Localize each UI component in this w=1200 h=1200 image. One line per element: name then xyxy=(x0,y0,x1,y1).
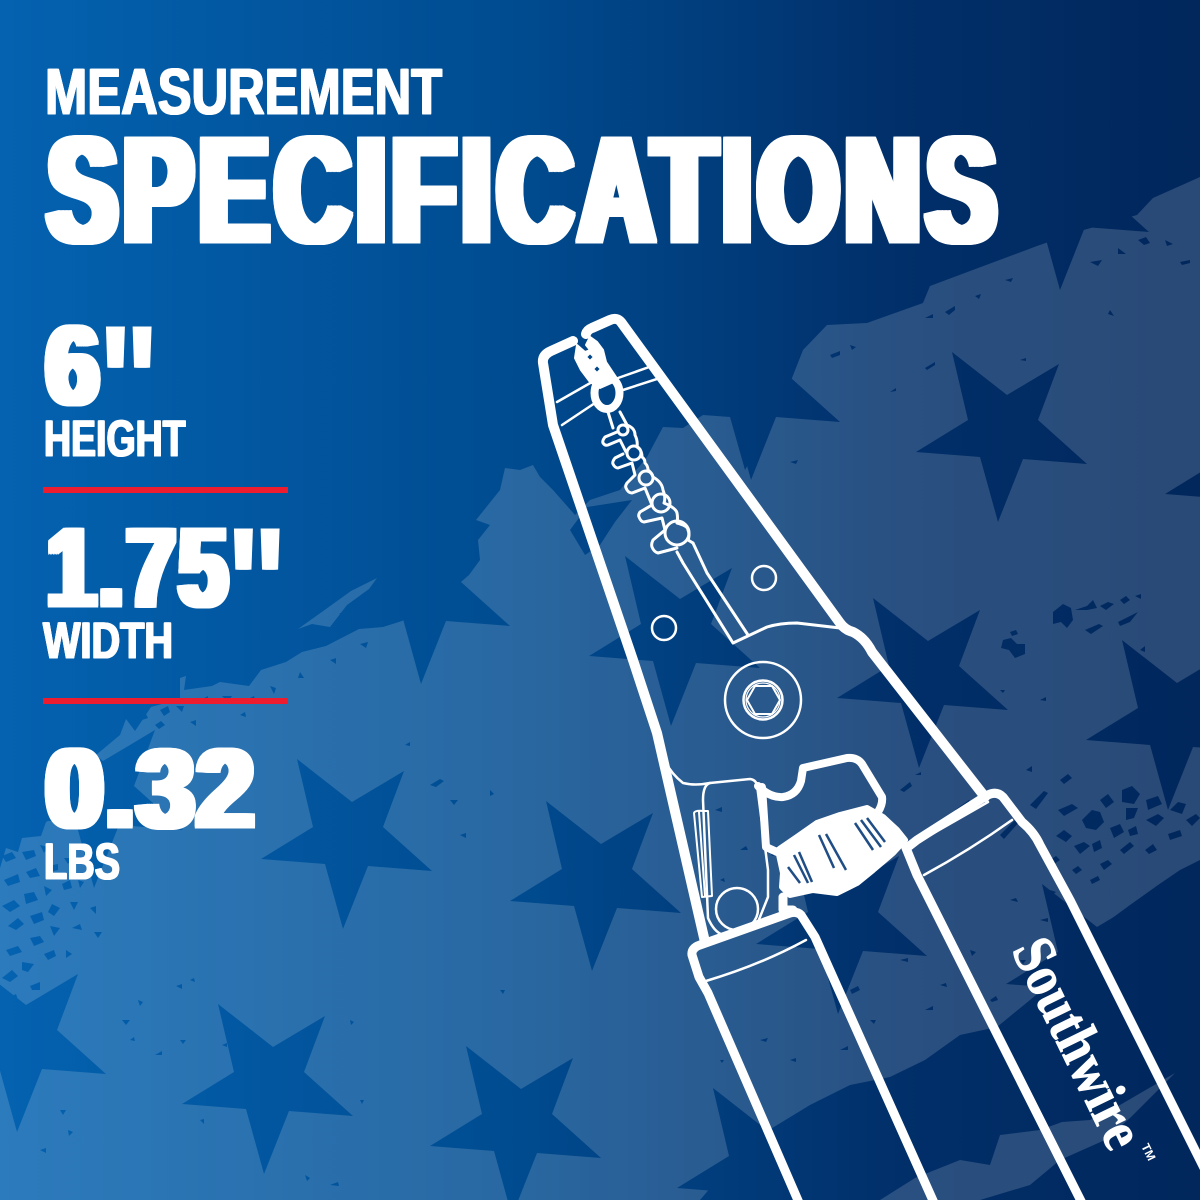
label: width: WIDTH xyxy=(43,612,173,669)
twisted jaw tip xyxy=(575,337,618,388)
illustration: wire stripper pliers outline xyxy=(543,319,1200,1200)
value: 6 inches xyxy=(44,291,155,475)
cutter eye xyxy=(594,377,620,409)
crossing lines on jaw xyxy=(557,366,660,425)
right jaw outer line xyxy=(586,319,985,797)
label: lbs: LBS xyxy=(44,833,120,890)
specification: width xyxy=(42,493,283,677)
value: 1.75 inches: '' xyxy=(230,493,283,677)
left jaw outer line xyxy=(543,341,705,942)
title line: specifications: SPECIFICATIONS xyxy=(48,105,1003,274)
trademark: TM xyxy=(1138,1141,1158,1163)
value: 1.75 inches xyxy=(47,493,283,677)
value: 6 inches: '' xyxy=(102,291,155,475)
pivot screw xyxy=(725,662,801,738)
handle notch outline xyxy=(758,758,882,812)
spring coil xyxy=(778,808,905,895)
left handle cap lines xyxy=(706,940,806,981)
tooth loops and edges xyxy=(603,412,677,553)
left handle xyxy=(692,897,935,1200)
lock pill xyxy=(694,811,712,897)
specification: weight xyxy=(44,726,256,890)
value: 6 inches: 6 xyxy=(46,303,99,428)
wire stripping teeth xyxy=(603,412,840,643)
divider xyxy=(43,698,288,704)
specification: height xyxy=(44,291,186,475)
inner vertical arm xyxy=(762,787,777,852)
tooth circles xyxy=(618,425,689,545)
thin neck curve xyxy=(660,745,757,787)
right handle xyxy=(906,793,1200,1200)
value: 0.32: 0.32 xyxy=(46,726,256,851)
title line: measurement: MEASUREMENT xyxy=(45,55,442,128)
stripper edge lines xyxy=(677,543,840,643)
value: 1.75 inches: 1.75 xyxy=(47,505,231,630)
logo: Southwire: Southwire xyxy=(999,927,1158,1159)
latch lever xyxy=(703,783,768,935)
label: height: HEIGHT xyxy=(44,410,186,467)
divider xyxy=(43,487,288,493)
rivet hole: lower xyxy=(652,616,676,640)
rivet hole: upper xyxy=(752,566,776,590)
lock circle xyxy=(716,888,758,930)
right handle cap lines xyxy=(918,802,1012,875)
title block xyxy=(44,55,1003,274)
